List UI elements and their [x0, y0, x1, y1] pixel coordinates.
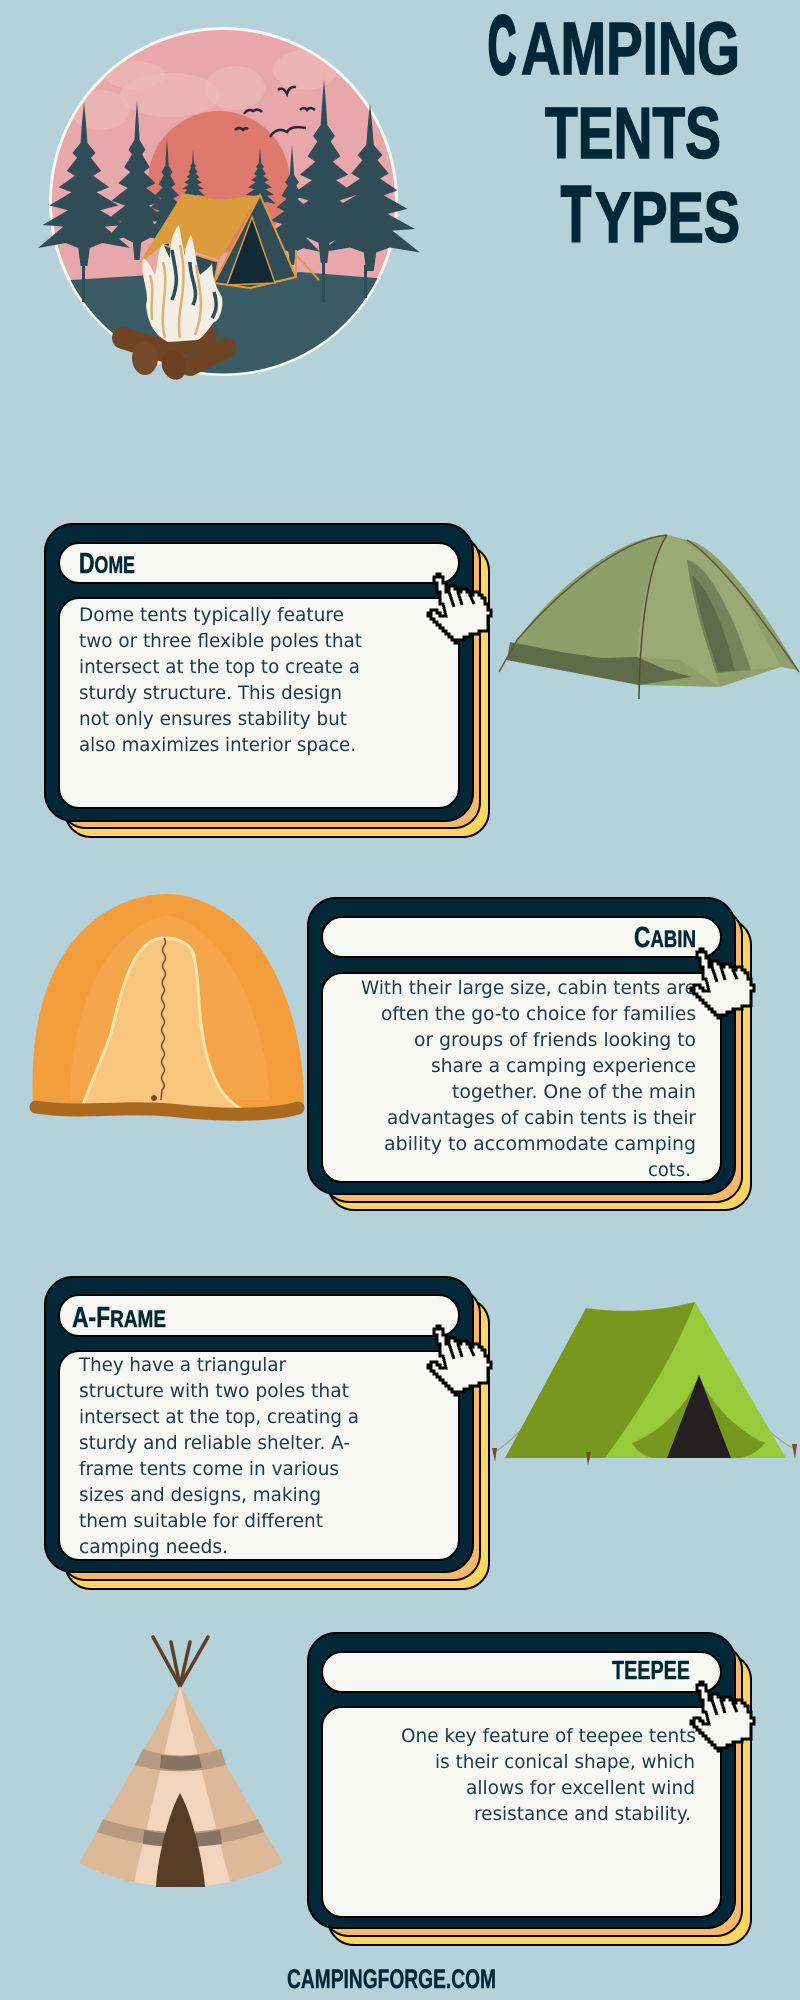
text: dome description: Dome tents typically feature	[79, 604, 344, 626]
title: YPES	[595, 179, 740, 258]
text: a-frame description: intersect at the top, creating a	[79, 1406, 359, 1428]
text: teepee description: allows for excellent wind	[466, 1777, 695, 1799]
stacked card layers	[308, 1633, 751, 1945]
illustration: dome tent	[499, 535, 799, 699]
title: TENTS	[545, 94, 721, 174]
heading: cabin: CABIN	[634, 922, 696, 954]
text: cabin description: share a camping experience	[431, 1055, 696, 1077]
campfire	[123, 225, 226, 383]
heading: dome: DOME	[79, 548, 135, 580]
footer: website: CAMPINGFORGE.COM	[287, 1964, 496, 1994]
stacked card layers	[308, 898, 751, 1210]
text: dome description: two or three flexible poles that	[79, 630, 362, 652]
title: C	[488, 0, 516, 91]
illustration: teepee tent	[79, 1637, 283, 1888]
text: dome description: sturdy structure. This design	[79, 682, 342, 704]
stacked card layers	[45, 1277, 489, 1589]
text: cabin description: With their large size, cabin tents are	[361, 977, 696, 999]
text: a-frame description: structure with two poles that	[79, 1380, 349, 1402]
birds	[235, 87, 315, 137]
text: a-frame description	[78, 1354, 359, 1558]
text: teepee description: is their conical shape, which	[435, 1751, 695, 1773]
text: cabin description	[361, 977, 696, 1181]
text: dome description: intersect at the top to create a	[79, 656, 360, 678]
text: dome description: not only ensures stability but	[79, 708, 347, 730]
illustration: camping scene badge	[38, 28, 420, 383]
text: cabin description: cots.	[648, 1159, 691, 1181]
text: a-frame description: They have a triangular	[78, 1354, 286, 1376]
text: dome description: also maximizes interior space.	[79, 734, 356, 756]
text: a-frame description: camping needs.	[79, 1536, 228, 1558]
text: cabin description: together. One of the main	[452, 1081, 696, 1103]
heading: teepee: TEEPEE	[612, 1655, 690, 1685]
panel: cabin	[308, 898, 754, 1210]
text: cabin description: or groups of friends looking to	[414, 1029, 696, 1051]
stacked card layers	[45, 524, 489, 837]
text: a-frame description: them suitable for different	[79, 1510, 323, 1532]
illustration: cabin tent	[32, 894, 304, 1114]
illustration: a-frame tent	[492, 1302, 797, 1466]
icon: pointing hand cursor	[691, 949, 754, 1018]
title	[488, 0, 740, 258]
trees	[38, 79, 420, 302]
text: a-frame description: frame tents come in various	[79, 1458, 339, 1480]
text: cabin description: ability to accommodate camping	[384, 1133, 696, 1155]
heading: a-frame: A-FRAME	[72, 1302, 166, 1334]
panel: teepee	[308, 1633, 754, 1945]
text: teepee description	[401, 1725, 696, 1825]
text: a-frame description: sturdy and reliable shelter. A-	[79, 1432, 350, 1454]
text: teepee description: One key feature of teepee tents	[401, 1725, 696, 1747]
text: cabin description: often the go-to choice for families	[381, 1003, 696, 1025]
icon: pointing hand cursor	[691, 1682, 754, 1751]
icon: pointing hand cursor	[428, 574, 491, 643]
panel: dome	[45, 524, 491, 837]
text: a-frame description: sizes and designs, making	[79, 1484, 321, 1506]
title: T	[561, 169, 591, 258]
tent	[138, 193, 319, 288]
icon: pointing hand cursor	[428, 1326, 491, 1395]
panel: a-frame	[45, 1277, 491, 1589]
text: dome description	[79, 604, 362, 756]
text: teepee description: resistance and stability.	[474, 1803, 691, 1825]
text: cabin description: advantages of cabin tents is their	[387, 1107, 696, 1129]
